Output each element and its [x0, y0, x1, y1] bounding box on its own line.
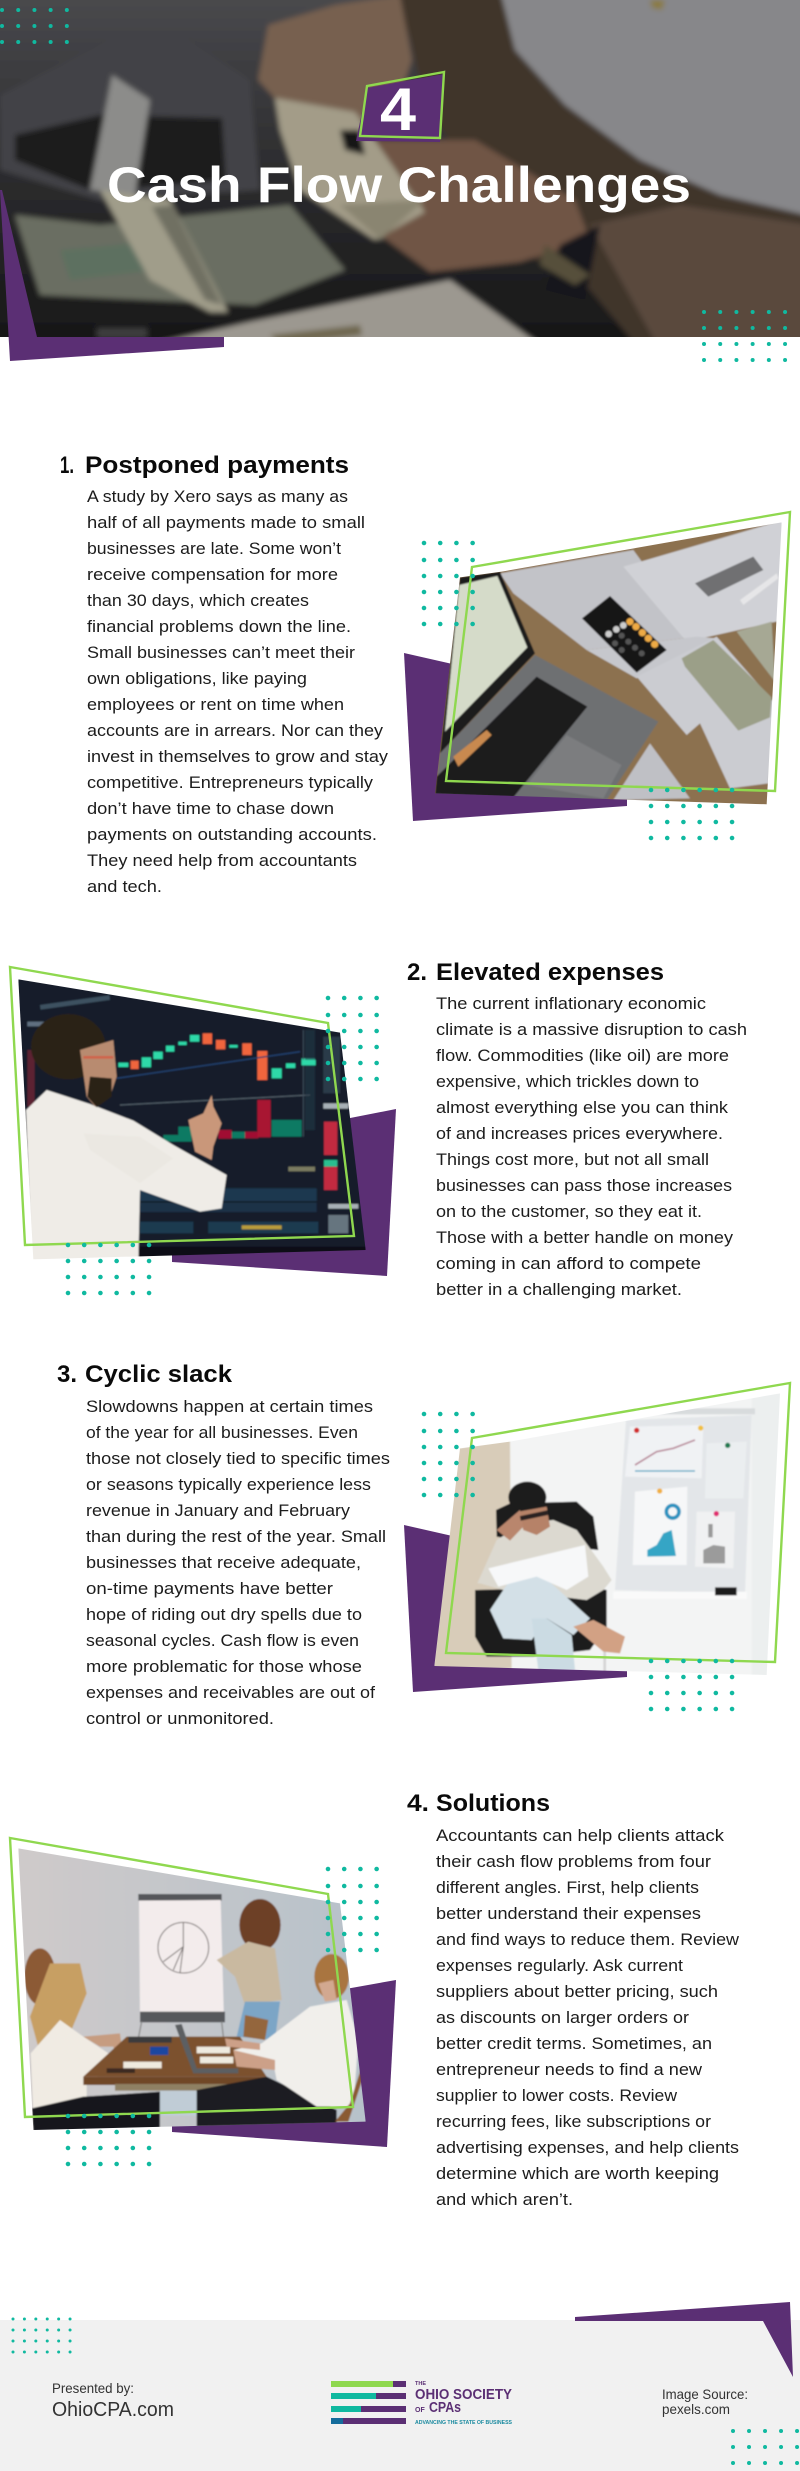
- heading 2: 2.: [407, 959, 427, 986]
- dots top: [424, 543, 476, 624]
- dots top: [328, 998, 380, 1079]
- body 4: their cash flow problems from four: [436, 1852, 712, 1871]
- body 4: different angles. First, help clients: [436, 1878, 699, 1897]
- logo: Ohio Society of CPAs: OHIO SOCIETY: [415, 2387, 512, 2403]
- body 1: employees or rent on time when: [87, 695, 344, 714]
- logo: Ohio Society of CPAs: THE: [415, 2381, 426, 2387]
- presented by: [52, 2380, 174, 2421]
- body 3: [86, 1397, 390, 1728]
- body 2: coming in can afford to compete: [436, 1254, 701, 1273]
- body 2: Things cost more, but not all small: [436, 1150, 709, 1169]
- body 4: [436, 1826, 740, 2209]
- body 1: A study by Xero says as many as: [87, 487, 348, 506]
- body 4: advertising expenses, and help clients: [436, 2138, 739, 2157]
- dots bottom: [651, 790, 735, 838]
- body 4: as discounts on larger orders or: [436, 2008, 690, 2027]
- body 1: don’t have time to chase down: [87, 799, 334, 818]
- hero photo: hands counting cash: [0, 0, 800, 350]
- body 1: competitive. Entrepreneurs typically: [87, 773, 374, 792]
- footer dots top left: [13, 2319, 72, 2352]
- purple backing shape: [404, 1525, 627, 1692]
- logo: Ohio Society of CPAs: [331, 2381, 512, 2426]
- section 1: postponed payments text: [60, 452, 389, 896]
- body 2: on to the customer, so they eat it.: [436, 1202, 702, 1221]
- body 4: better credit terms. Sometimes, an: [436, 2034, 712, 2053]
- body 4: and which aren’t.: [436, 2190, 573, 2209]
- logo: Ohio Society of CPAs: OF: [415, 2407, 425, 2414]
- purple backing shape: [172, 1109, 396, 1276]
- dots top: [328, 1869, 380, 1950]
- heading 3: Cyclic slack: [85, 1361, 232, 1388]
- heading 3: 3.: [57, 1361, 77, 1388]
- heading 2: Elevated expenses: [436, 959, 664, 986]
- body 1: They need help from accountants: [87, 851, 357, 870]
- hero dots bottom right: [704, 312, 790, 360]
- purple backing shape: [172, 1980, 396, 2147]
- body 4: suppliers about better pricing, such: [436, 1982, 718, 2001]
- body 1: own obligations, like paying: [87, 669, 307, 688]
- dots bottom: [68, 1245, 152, 1293]
- logo: Ohio Society of CPAs: CPAs: [429, 2400, 461, 2416]
- presented by: Presented by:: [52, 2380, 134, 2396]
- image source: [662, 2386, 748, 2417]
- hero corner shape: [0, 190, 224, 361]
- body 3: or seasons typically experience less: [86, 1475, 371, 1494]
- body 3: revenue in January and February: [86, 1501, 351, 1520]
- body 2: The current inflationary economic: [436, 994, 706, 1013]
- footer corner shape: [575, 2302, 793, 2377]
- body 1: than 30 days, which creates: [87, 591, 309, 610]
- number badge: [356, 72, 444, 143]
- section 4: solutions text: [407, 1790, 740, 2209]
- body 4: determine which are worth keeping: [436, 2164, 719, 2183]
- body 1: half of all payments made to small: [87, 513, 365, 532]
- body 2: climate is a massive disruption to cash: [436, 1020, 747, 1039]
- green frame: [446, 512, 790, 791]
- body 3: seasonal cycles. Cash flow is even: [86, 1631, 359, 1650]
- body 1: businesses are late. Some won’t: [87, 539, 341, 558]
- body 2: flow. Commodities (like oil) are more: [436, 1046, 729, 1065]
- body 4: expenses regularly. Ask current: [436, 1956, 683, 1975]
- heading 4: Solutions: [436, 1790, 550, 1817]
- body 3: than during the rest of the year. Small: [86, 1527, 386, 1546]
- logo: Ohio Society of CPAs: ADVANCING THE STATE OF BUSINESS: [415, 2420, 512, 2426]
- body 3: expenses and receivables are out of: [86, 1683, 375, 1702]
- photo: team meeting around flip chart: [13, 1843, 373, 2137]
- footer dots bottom right: [733, 2431, 800, 2463]
- body 3: control or unmonitored.: [86, 1709, 274, 1728]
- photo: man pointing at trading chart screen: [13, 973, 373, 1263]
- body 3: more problematic for those whose: [86, 1657, 362, 1676]
- body 1: and tech.: [87, 877, 162, 896]
- image source: pexels.com: [662, 2401, 730, 2417]
- body 3: those not closely tied to specific times: [86, 1449, 390, 1468]
- footer background: [0, 2320, 800, 2471]
- body 1: Small businesses can’t meet their: [87, 643, 355, 662]
- body 1: accounts are in arrears. Nor can they: [87, 721, 384, 740]
- body 2: Those with a better handle on money: [436, 1228, 734, 1247]
- heading 1: 1.: [60, 452, 74, 479]
- body 1: [87, 487, 389, 896]
- number badge: 4: [380, 76, 417, 143]
- body 3: of the year for all businesses. Even: [86, 1423, 358, 1442]
- purple backing shape: [404, 653, 627, 821]
- presented by: OhioCPA.com: [52, 2399, 174, 2421]
- hero dots top left: [2, 10, 72, 42]
- hero banner: [0, 0, 800, 361]
- body 4: entrepreneur needs to find a new: [436, 2060, 703, 2079]
- green frame: [10, 1838, 353, 2117]
- body 3: on-time payments have better: [86, 1579, 334, 1598]
- body 4: and find ways to reduce them. Review: [436, 1930, 740, 1949]
- photo: woman reviewing finance charts on whiteboard: [430, 1390, 787, 1680]
- body 1: receive compensation for more: [87, 565, 338, 584]
- image source: Image Source:: [662, 2386, 748, 2402]
- body 2: expensive, which trickles down to: [436, 1072, 699, 1091]
- body 2: almost everything else you can think: [436, 1098, 729, 1117]
- section 2 image group: [10, 967, 396, 1293]
- body 1: payments on outstanding accounts.: [87, 825, 377, 844]
- dots top: [424, 1414, 476, 1495]
- body 2: [436, 994, 747, 1299]
- body 4: better understand their expenses: [436, 1904, 701, 1923]
- green frame: [446, 1383, 790, 1662]
- body 3: hope of riding out dry spells due to: [86, 1605, 362, 1624]
- body 3: businesses that receive adequate,: [86, 1553, 361, 1572]
- body 2: of and increases prices everywhere.: [436, 1124, 723, 1143]
- body 4: recurring fees, like subscriptions or: [436, 2112, 712, 2131]
- heading 1: Postponed payments: [85, 452, 349, 479]
- dots bottom: [651, 1661, 735, 1709]
- title: Cash Flow Challenges: [107, 157, 691, 213]
- section 1 image group: [404, 512, 790, 838]
- photo: laptop, phone calculator and cash on desk: [430, 517, 787, 810]
- heading 4: 4.: [407, 1790, 429, 1817]
- footer: [0, 2302, 800, 2471]
- body 4: supplier to lower costs. Review: [436, 2086, 678, 2105]
- body 3: Slowdowns happen at certain times: [86, 1397, 373, 1416]
- section 3: cyclic slack text: [57, 1361, 390, 1728]
- section 3 image group: [404, 1383, 790, 1709]
- body 2: businesses can pass those increases: [436, 1176, 732, 1195]
- section 2: elevated expenses text: [407, 959, 747, 1299]
- body 2: better in a challenging market.: [436, 1280, 682, 1299]
- green frame: [10, 967, 354, 1245]
- body 4: Accountants can help clients attack: [436, 1826, 725, 1845]
- body 1: invest in themselves to grow and stay: [87, 747, 389, 766]
- body 1: financial problems down the line.: [87, 617, 351, 636]
- section 4 image group: [10, 1838, 396, 2164]
- dots bottom: [68, 2116, 152, 2164]
